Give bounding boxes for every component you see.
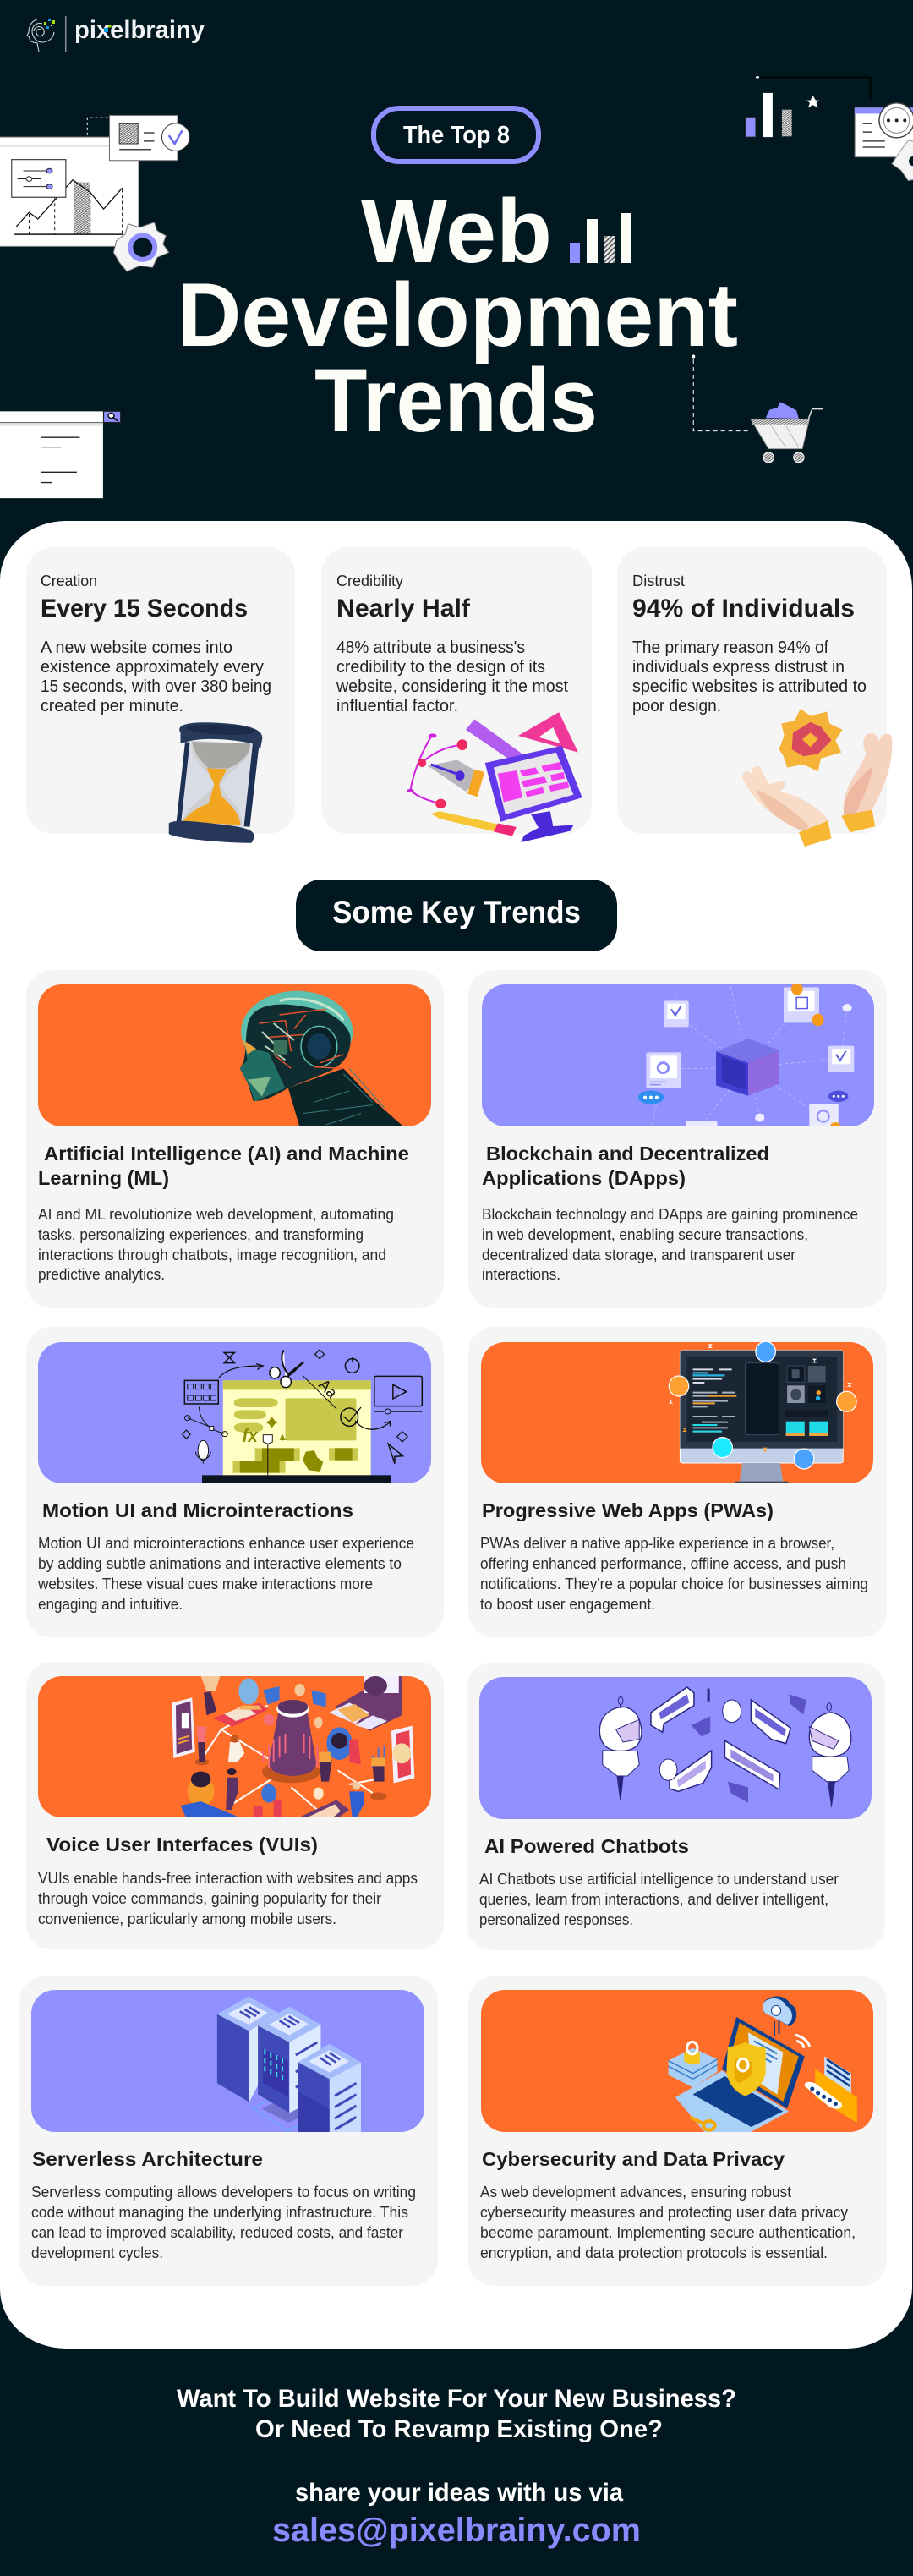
trend text: PWAs deliver a native app-like experience in a browser,	[480, 1535, 834, 1552]
icon: check card	[85, 115, 190, 161]
trend text	[38, 1870, 418, 1927]
image: robot head on orange	[38, 984, 431, 1127]
panel: creation stat: Every 15 Seconds	[41, 595, 248, 622]
image: isometric servers on purple	[31, 1990, 424, 2132]
trend text: Blockchain technology and DApps are gaining prominence	[482, 1206, 858, 1223]
trend text: VUIs enable hands-free interaction with websites and apps	[38, 1870, 418, 1887]
trend title: Applications (DApps)	[482, 1167, 686, 1189]
icon: design tools and monitor	[407, 712, 582, 842]
stat text: 48% attribute a business's	[336, 639, 525, 657]
trend text	[482, 1206, 858, 1283]
trend text: in web development, enabling secure transactions,	[482, 1226, 808, 1243]
trend text: websites. These visual cues make interactions more	[37, 1576, 373, 1592]
trend text: encryption, and data protection protocols is essential.	[480, 2244, 828, 2261]
title: Trends	[314, 349, 598, 451]
trend text: by adding subtle animations and interactive elements to	[38, 1555, 402, 1572]
trend text: tasks, personalizing experiences, and transforming	[38, 1226, 364, 1243]
trend title: Cybersecurity and Data Privacy	[482, 2148, 785, 2170]
panel: distrust stat: Distrust	[632, 572, 685, 589]
panel: voice UI	[26, 1662, 444, 1949]
trend text	[480, 1535, 868, 1613]
wordmark: pixelbrainy	[74, 16, 205, 44]
trend text	[37, 1535, 414, 1613]
call to action: sales@pixelbrainy.com	[272, 2512, 641, 2549]
image: robots and chat bubbles on purple	[479, 1677, 872, 1819]
trend text	[31, 2184, 416, 2261]
panel: blockchain	[468, 970, 887, 1308]
icon: spiral head	[27, 19, 55, 52]
panel: cybersecurity	[468, 1976, 887, 2286]
panel: motion UI	[26, 1327, 444, 1637]
image: secure laptop on orange	[481, 1990, 873, 2132]
trend text: queries, learn from interactions, and deliver intelligent,	[479, 1891, 828, 1908]
icon: hourglass	[169, 722, 262, 843]
icon: title bar chart	[570, 213, 631, 263]
trend title: Motion UI and Microinteractions	[42, 1499, 353, 1521]
stat text: The primary reason 94% of	[632, 639, 828, 657]
stat text	[632, 639, 867, 715]
white content panel	[0, 521, 912, 2349]
image: smart speaker scene on orange	[38, 1676, 431, 1818]
trend text: interactions.	[482, 1266, 560, 1283]
stat text	[41, 639, 271, 715]
panel: creation stat: Creation	[41, 572, 97, 589]
trend text: convenience, particularly among mobile users.	[38, 1910, 336, 1927]
panel: creation stat	[26, 547, 295, 843]
trend title: Serverless Architecture	[32, 2148, 263, 2170]
panel: distrust stat: 94% of Individuals	[632, 595, 855, 622]
trend text: code without managing the underlying infrastructure. This	[31, 2204, 408, 2221]
image: motion design window on purple	[38, 1342, 431, 1484]
image: monitor with app code on orange	[481, 1341, 873, 1484]
trend text: Motion UI and microinteractions enhance user experience	[38, 1535, 414, 1552]
trend text: As web development advances, ensuring robust	[480, 2184, 791, 2201]
trend text: become paramount. Implementing secure authentication,	[480, 2224, 856, 2241]
decoration: hero line art	[0, 76, 913, 498]
trend text: notifications. They're a popular choice for businesses aiming	[480, 1576, 868, 1592]
trend text: decentralized data storage, and transparent user	[482, 1247, 795, 1263]
trend text: can lead to improved scalability, reduced costs, and faster	[31, 2224, 403, 2241]
trend title: AI Powered Chatbots	[484, 1835, 689, 1857]
trend text: engaging and intuitive.	[38, 1596, 183, 1613]
trend title: Voice User Interfaces (VUIs)	[46, 1833, 318, 1855]
stat text: 15 seconds, with over 380 being	[41, 677, 271, 696]
trend title	[38, 1143, 409, 1189]
panel: chatbots	[467, 1663, 885, 1950]
panel: credibility stat: Credibility	[336, 572, 404, 589]
stat text: A new website comes into	[41, 639, 232, 657]
title: Web	[361, 180, 552, 282]
panel: credibility stat	[321, 547, 592, 842]
icon: hands holding a badge	[742, 709, 892, 847]
heading: Some Key Trends	[296, 880, 617, 951]
trend title: Artificial Intelligence (AI) and Machine	[44, 1143, 409, 1165]
call to action: share your ideas with us via	[295, 2479, 623, 2507]
heading: Some Key Trends: Some Key Trends	[332, 895, 581, 929]
stat text: credibility to the design of its	[336, 658, 545, 677]
trend text: offering enhanced performance, offline access, and push	[480, 1555, 846, 1572]
trend text: Serverless computing allows developers to focus on writing	[31, 2184, 416, 2201]
image: blockchain network on purple	[482, 983, 874, 1130]
image: motion design window on purple: Aa	[315, 1375, 342, 1402]
trend title: Blockchain and Decentralized	[486, 1143, 769, 1165]
icon: top right bars and window	[746, 76, 913, 181]
trend text: cybersecurity measures and protecting user data privacy	[480, 2204, 848, 2221]
logo	[27, 16, 205, 52]
trend text: AI Chatbots use artificial intelligence to understand user	[479, 1871, 839, 1888]
trend text: through voice commands, gaining popularity for their	[38, 1890, 381, 1907]
panel: AI and ML	[26, 970, 444, 1308]
trend text: to boost user engagement.	[480, 1596, 655, 1613]
trend text	[480, 2184, 856, 2261]
trend title	[482, 1143, 769, 1189]
icon: gear	[113, 222, 169, 271]
panel: serverless	[19, 1976, 438, 2286]
trend text: personalized responses.	[479, 1911, 633, 1928]
stat text: website, considering it the most	[336, 677, 568, 696]
panel: credibility stat: Nearly Half	[336, 595, 471, 622]
call to action: Want To Build Website For Your New Business?	[177, 2385, 736, 2413]
stat text: influential factor.	[336, 697, 458, 715]
call to action: Or Need To Revamp Existing One?	[255, 2415, 663, 2443]
panel: distrust stat	[617, 547, 892, 847]
trend title: Progressive Web Apps (PWAs)	[482, 1499, 774, 1521]
stat text: individuals express distrust in	[632, 658, 845, 677]
trend text: AI and ML revolutionize web development, automating	[38, 1206, 394, 1223]
trend text: development cycles.	[31, 2244, 163, 2261]
image: motion design window on purple: fx	[242, 1425, 259, 1446]
icon: chart window	[0, 137, 139, 246]
trend text	[479, 1871, 839, 1928]
title	[177, 180, 738, 451]
trend text: interactions through chatbots, image recognition, and	[38, 1247, 386, 1263]
badge: The Top 8	[374, 108, 539, 162]
trend title: Learning (ML)	[38, 1167, 169, 1189]
panel: PWAs	[468, 1327, 887, 1637]
stat text: created per minute.	[41, 697, 183, 715]
icon: search window	[0, 411, 121, 498]
stat text: existence approximately every	[41, 658, 264, 677]
stat text: poor design.	[632, 697, 721, 715]
badge: The Top 8: The Top 8	[403, 122, 510, 149]
title: Development	[177, 264, 738, 365]
stat text: specific websites is attributed to	[632, 677, 867, 696]
trend text: predictive analytics.	[38, 1266, 165, 1283]
call to action	[177, 2385, 736, 2549]
trend text	[38, 1206, 394, 1283]
icon: shopping cart	[692, 355, 823, 463]
stat text	[336, 639, 568, 715]
